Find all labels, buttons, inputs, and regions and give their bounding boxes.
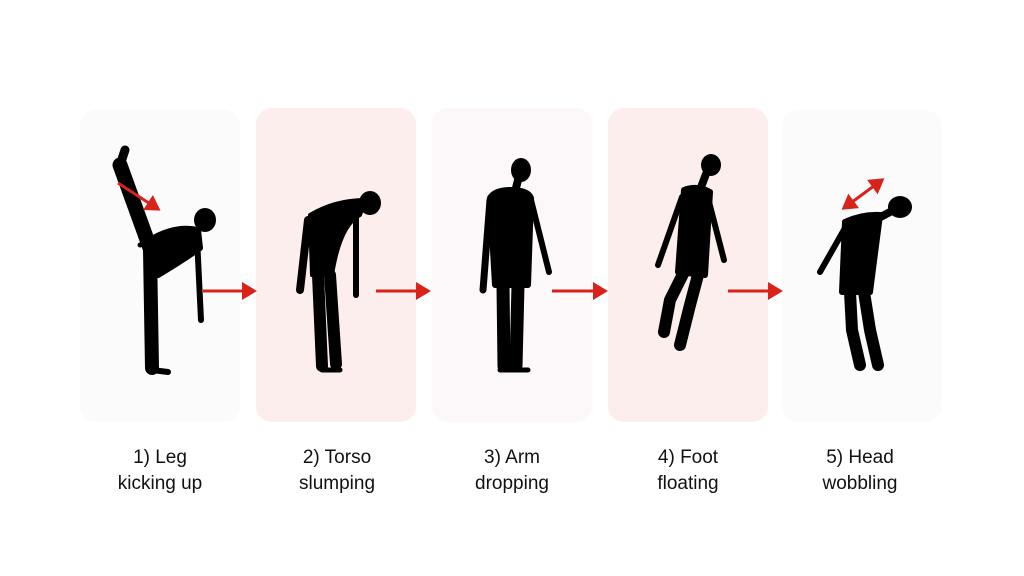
figure 5: head wobbling <box>820 196 912 365</box>
arrow 1 to 2 <box>203 290 254 292</box>
figure 3: arm dropping <box>483 158 549 370</box>
label 1: 1) Leg <box>133 447 187 468</box>
label 5: wobbling <box>822 473 898 494</box>
label 3: 3) Arm <box>484 447 540 468</box>
label 2 <box>299 447 375 494</box>
arrow: kick motion <box>118 183 158 209</box>
label 3 <box>475 447 549 494</box>
label 4: 4) Foot <box>658 447 718 468</box>
figure 2: torso slumping <box>300 191 381 370</box>
label 5 <box>822 447 898 494</box>
panel 4 <box>608 108 768 422</box>
panel 5 <box>782 110 942 422</box>
arrow 3 to 4 <box>552 290 605 292</box>
label 1: kicking up <box>118 473 202 494</box>
arrow 2 to 3 <box>376 290 428 292</box>
label 3: dropping <box>475 473 549 494</box>
label 2: 2) Torso <box>303 447 371 468</box>
label 5: 5) Head <box>826 447 894 468</box>
arrow 4 to 5 <box>728 290 780 292</box>
label 4 <box>657 447 719 494</box>
label 1 <box>118 447 202 494</box>
panel 1 <box>80 110 240 422</box>
arrow: head wobble <box>844 180 882 208</box>
figure 4: foot floating <box>658 154 724 345</box>
panel 2 <box>256 108 416 422</box>
label 4: floating <box>657 473 719 494</box>
panel 3 <box>432 108 592 422</box>
figure 1: leg kicking <box>120 150 216 372</box>
label 2: slumping <box>299 473 375 494</box>
